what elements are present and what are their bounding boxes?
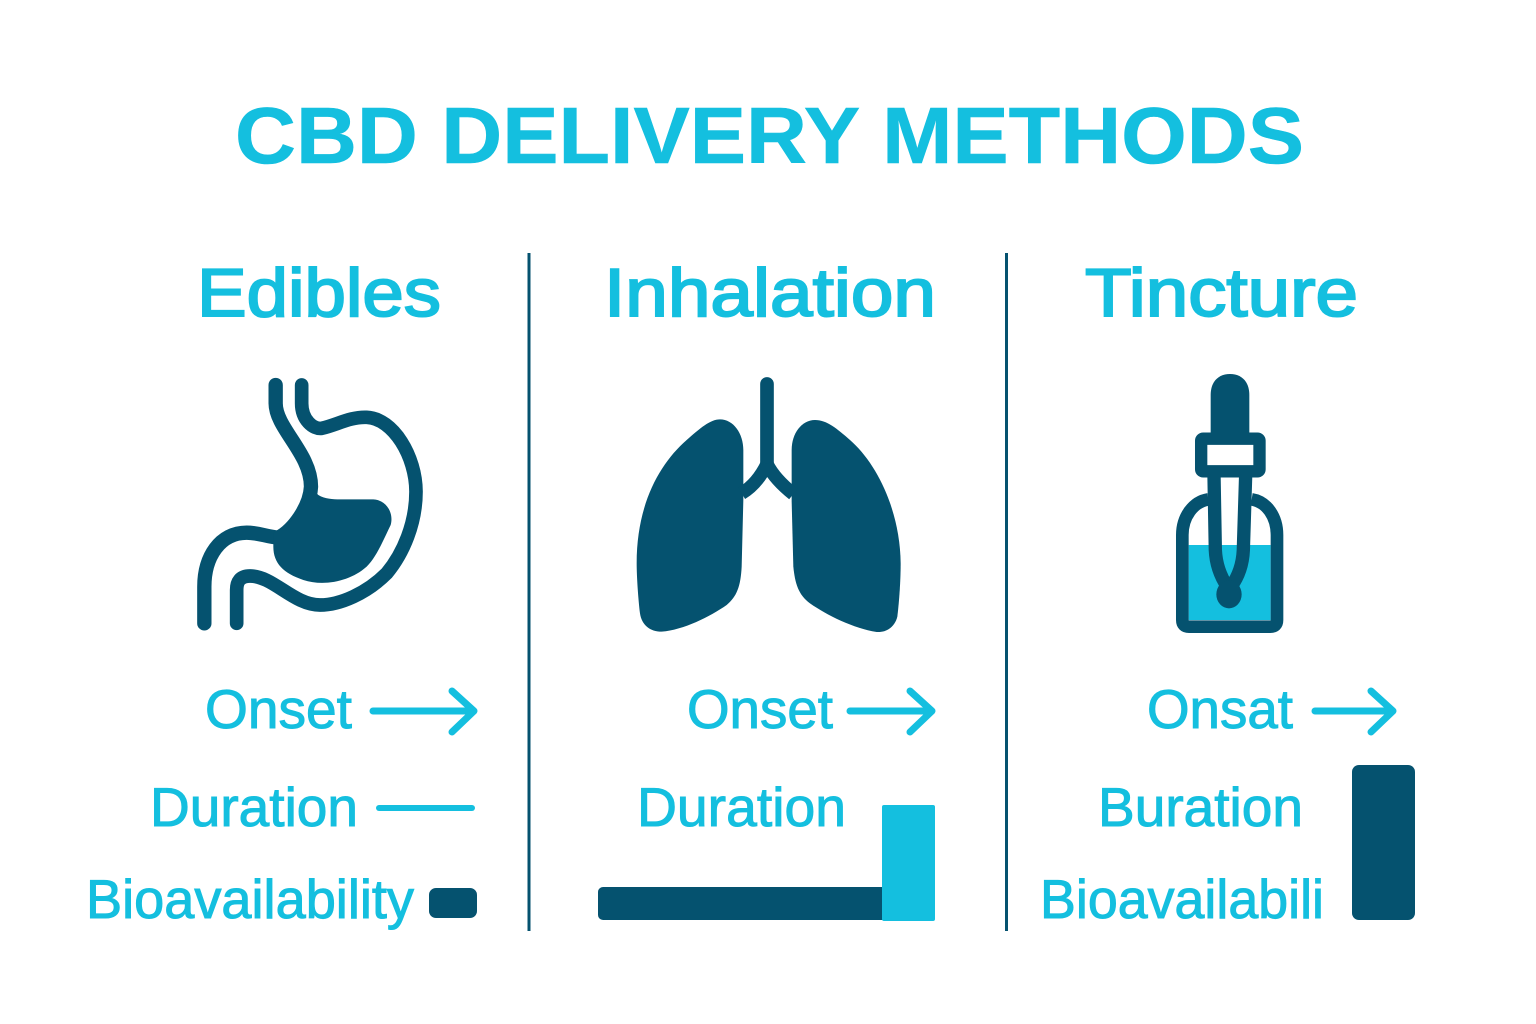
panel: tincture xyxy=(1040,255,1415,930)
icon: dropper bottle xyxy=(1182,374,1277,627)
row: onset: Onsat xyxy=(1147,678,1293,740)
row: duration: Duration xyxy=(637,776,846,838)
row: duration: Duration xyxy=(150,776,358,838)
row: bioavailability: Bioavailability xyxy=(86,868,414,930)
heading: edibles: Edibles xyxy=(197,255,441,331)
icon: lungs xyxy=(637,384,901,632)
line: duration xyxy=(376,805,475,811)
icon: stomach xyxy=(204,385,416,623)
divider right xyxy=(1005,253,1008,931)
bar: duration cyan xyxy=(882,805,935,921)
row: bioavailability: Bioavailabili xyxy=(1040,868,1324,930)
panel: inhalation xyxy=(598,255,936,921)
bar: bioavailability navy xyxy=(598,887,888,920)
bar: navy xyxy=(1352,765,1415,920)
row: onset: Onset xyxy=(687,678,833,740)
heading: inhalation: Inhalation xyxy=(604,255,936,331)
arrow: onset xyxy=(850,691,932,732)
heading: tincture: Tincture xyxy=(1085,255,1358,331)
bar: bioavailability xyxy=(429,888,477,918)
row: onset xyxy=(1147,678,1393,740)
arrow: onset xyxy=(1315,691,1393,732)
row: onset: Onset xyxy=(205,678,352,740)
arrow: onset xyxy=(373,691,474,732)
divider left xyxy=(528,253,530,931)
title: CBD DELIVERY METHODS xyxy=(235,91,1304,180)
panel: edibles xyxy=(86,255,477,930)
row: duration: Buration xyxy=(1098,776,1303,838)
row: duration xyxy=(150,776,475,838)
row: onset xyxy=(205,678,474,740)
row: onset xyxy=(687,678,932,740)
